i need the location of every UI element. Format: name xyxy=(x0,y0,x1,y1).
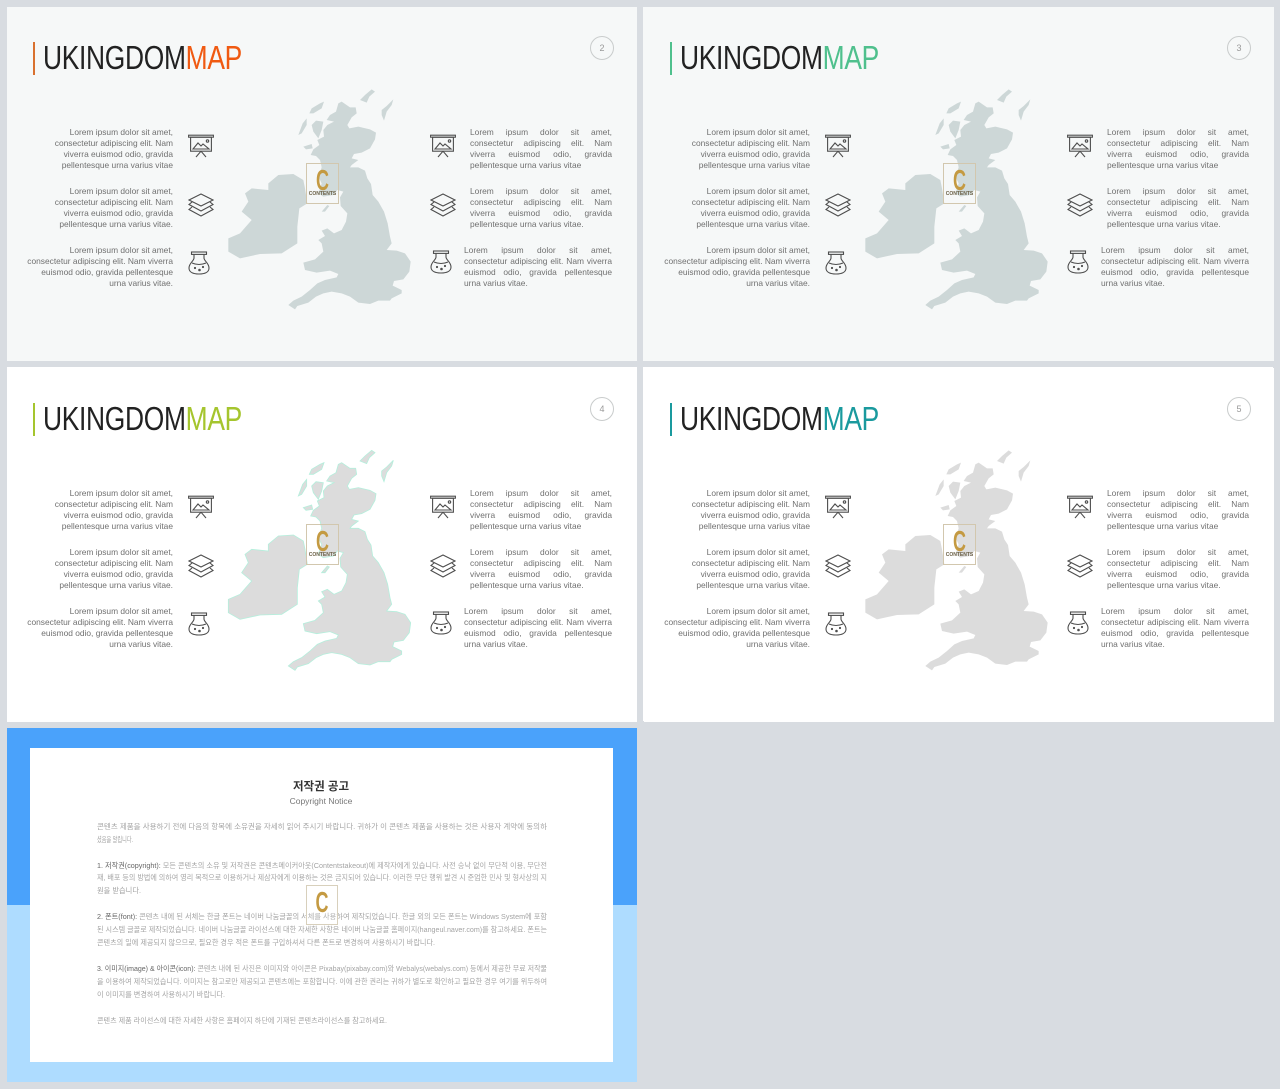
left text 1: consectetur adipiscing elit. Nam xyxy=(692,138,810,148)
left text 2: Lorem ipsum dolor sit amet, xyxy=(707,186,810,196)
icon: flask right xyxy=(1068,250,1088,274)
right text 2: pellentesque urna varius vitae. xyxy=(470,219,584,229)
right text 3: consectetur adipiscing elit. Nam viverra xyxy=(1101,256,1249,266)
left text 2: viverra euismod odio, gravida xyxy=(64,208,173,218)
right text 3 xyxy=(1101,245,1250,288)
right text 2: consectetur adipiscing elit. Nam xyxy=(470,197,612,207)
left text 3: urna varius vitae. xyxy=(109,278,173,288)
left text 2 xyxy=(644,547,810,591)
left text 1: viverra euismod odio, gravida xyxy=(64,149,173,159)
left text 1: viverra euismod odio, gravida xyxy=(64,510,173,520)
right text 2: Lorem ipsum dolor sit amet, xyxy=(1107,186,1249,196)
notice body text: 을 이용하여 제작되었습니다. 이미지는 참고로만 제공되고 콘텐츠에는 포함합니다. 이에 관한 권리는 귀하가 별도로 확인하고 필요한 경우 여기를 위두하여 xyxy=(97,976,547,986)
left text 2: pellentesque urna varius vitae. xyxy=(59,580,173,590)
right text 3: consectetur adipiscing elit. Nam viverra xyxy=(464,256,612,266)
left text 3 xyxy=(664,245,810,288)
two-tone blue background xyxy=(7,728,637,1082)
left text 1: pellentesque urna varius vitae xyxy=(62,521,173,531)
left text 1: viverra euismod odio, gravida xyxy=(701,149,810,159)
right text 1 xyxy=(470,488,612,531)
watermark logo: C xyxy=(953,165,966,197)
right text 1: pellentesque urna varius vitae xyxy=(1107,521,1218,531)
right text 2: Lorem ipsum dolor sit amet, xyxy=(470,186,612,196)
right text 1: consectetur adipiscing elit. Nam xyxy=(470,138,612,148)
icon: presentation board xyxy=(188,496,214,518)
right text 2 xyxy=(470,547,612,591)
icon: layers right xyxy=(430,193,456,217)
right text 2: viverra euismod odio, gravida xyxy=(1107,569,1249,579)
icon: layers right xyxy=(1067,193,1093,217)
watermark logo xyxy=(306,163,339,204)
left text 2: consectetur adipiscing elit. Nam xyxy=(55,558,173,568)
left text 1: consectetur adipiscing elit. Nam xyxy=(692,499,810,509)
icon: layers xyxy=(825,554,851,578)
icon: layers xyxy=(825,193,851,217)
left text 1 xyxy=(55,488,174,531)
notice body text: 원을 받습니다. xyxy=(97,885,141,895)
left text 2: viverra euismod odio, gravida xyxy=(64,569,173,579)
heading: UKINGDOMMAP xyxy=(43,39,242,76)
left text 3: urna varius vitae. xyxy=(746,639,810,649)
notice body text: 3. 이미지(image) & 아이콘(icon): 콘텐츠 내에 된 사진은 이미지와 아이콘은 Pixabay(pixabay.com)와 Webalys(webalys.com) 등에서 제공한 무료 저작물 xyxy=(97,963,547,973)
notice body text: 이 이미지를 변경하여 사용하시기 바랍니다. xyxy=(97,989,225,999)
map of UK and Ireland xyxy=(228,90,411,310)
right text 1: Lorem ipsum dolor sit amet, xyxy=(1107,488,1249,498)
right text 2: consectetur adipiscing elit. Nam xyxy=(1107,197,1249,207)
right text 1: pellentesque urna varius vitae xyxy=(470,521,581,531)
notice body text: 콘텐츠 제품을 사용하기 전에 다음의 항목에 소유권을 자세히 읽어 주시기 바랍니다. 귀하가 이 콘텐츠 제품을 사용하는 것은 사용자 계약에 동의하 xyxy=(97,821,547,831)
watermark logo: C xyxy=(316,887,328,919)
icon: flask right xyxy=(430,611,452,634)
left text 3: euismod odio, gravida pellentesque xyxy=(678,267,810,277)
notice heading: 저작권 공고 xyxy=(293,779,349,793)
heading: UKINGDOMMAP xyxy=(680,39,879,76)
right text 1 xyxy=(1107,488,1249,532)
right text 2 xyxy=(470,186,612,229)
icon: presentation board right xyxy=(1067,134,1093,158)
right text 3: euismod odio, gravida pellentesque xyxy=(1101,628,1249,638)
icon: presentation board right xyxy=(430,496,456,518)
icon: presentation board xyxy=(825,134,851,158)
icon: layers right xyxy=(1067,554,1093,578)
icon: presentation board xyxy=(188,134,214,158)
title accent bar xyxy=(33,403,35,436)
watermark logo xyxy=(306,886,338,924)
left text 3: euismod odio, gravida pellentesque xyxy=(41,628,173,638)
icon: layers xyxy=(188,554,214,578)
heading: UKINGDOMMAP xyxy=(680,400,879,437)
watermark logo xyxy=(943,524,976,565)
notice body text: 콘텐츠 제품 라이선스에 대한 자세한 사항은 홈페이지 하단에 기재된 콘텐츠라이선스를 참고하세요. xyxy=(97,1015,387,1025)
panel: slide 2 orange xyxy=(7,7,637,361)
left text 3: Lorem ipsum dolor sit amet, xyxy=(707,245,810,255)
right text 3 xyxy=(464,606,612,650)
right text 3: consectetur adipiscing elit. Nam viverra xyxy=(464,617,612,627)
right text 2: viverra euismod odio, gravida xyxy=(470,569,612,579)
page number: 5 xyxy=(1236,404,1242,414)
right text 2: consectetur adipiscing elit. Nam xyxy=(470,558,612,568)
right text 1: pellentesque urna varius vitae xyxy=(1107,160,1218,170)
icon: flask xyxy=(826,251,846,274)
map of UK and Ireland xyxy=(847,441,1057,676)
icon: layers xyxy=(188,193,214,217)
right text 3: euismod odio, gravida pellentesque xyxy=(464,267,612,277)
left text 1: Lorem ipsum dolor sit amet, xyxy=(707,127,810,137)
page number xyxy=(590,397,614,421)
left text 2 xyxy=(55,547,174,590)
watermark logo xyxy=(306,524,339,565)
watermark logo xyxy=(943,163,976,204)
right text 2: pellentesque urna varius vitae. xyxy=(470,580,584,590)
left text 3: urna varius vitae. xyxy=(109,639,173,649)
right text 1: viverra euismod odio, gravida xyxy=(1107,149,1249,159)
watermark logo: C xyxy=(316,526,329,558)
notice body text: 재, 배포 등의 방법에 의하여 영리 목적으로 이용하거나 제삼자에게 이용하는 것은 금지되어 있습니다. 이러한 무단 행위 발견 시 준엄한 민사 및 형사상의 지 xyxy=(97,872,547,882)
panel: slide 4 lime xyxy=(7,368,637,722)
left text 1: pellentesque urna varius vitae xyxy=(62,160,173,170)
left text 2: consectetur adipiscing elit. Nam xyxy=(692,197,810,207)
notice subheading: Copyright Notice xyxy=(290,796,353,806)
page number: 4 xyxy=(599,404,604,414)
map of UK and Ireland xyxy=(865,90,1048,310)
left text 2: consectetur adipiscing elit. Nam xyxy=(692,558,810,568)
left text 3 xyxy=(27,606,174,649)
left text 3 xyxy=(27,245,174,288)
icon: layers right xyxy=(430,554,456,578)
notice body text xyxy=(97,821,547,1025)
right text 1 xyxy=(470,127,612,170)
left text 1: Lorem ipsum dolor sit amet, xyxy=(70,127,173,137)
left text 3: Lorem ipsum dolor sit amet, xyxy=(707,606,810,616)
right text 3: Lorem ipsum dolor sit amet, xyxy=(1101,606,1249,616)
left text 3 xyxy=(644,606,810,650)
right text 2 xyxy=(1107,186,1250,229)
title accent bar xyxy=(670,403,672,436)
right text 2: viverra euismod odio, gravida xyxy=(1107,208,1249,218)
right text 1: Lorem ipsum dolor sit amet, xyxy=(1107,127,1249,137)
right text 3 xyxy=(1101,606,1249,650)
icon: presentation board right xyxy=(430,134,456,158)
title accent bar xyxy=(33,42,35,75)
watermark logo: CONTENTS xyxy=(309,191,336,197)
right text 1: consectetur adipiscing elit. Nam xyxy=(470,499,612,509)
right text 3: euismod odio, gravida pellentesque xyxy=(464,628,612,638)
heading: UKINGDOMMAP xyxy=(43,400,242,437)
left text 3: consectetur adipiscing elit. Nam viverra xyxy=(27,256,173,266)
right text 1: Lorem ipsum dolor sit amet, xyxy=(470,127,612,137)
left text 1: pellentesque urna varius vitae xyxy=(699,160,810,170)
icon: flask xyxy=(188,251,210,274)
page number xyxy=(1227,397,1251,421)
panel: slide 3 green xyxy=(644,7,1274,361)
icon: flask xyxy=(188,612,210,636)
left text 1 xyxy=(692,127,810,170)
page number: 3 xyxy=(1236,43,1242,53)
icon: flask right xyxy=(430,250,452,274)
notice body text: 셨음을 알립니다. xyxy=(97,834,133,844)
watermark logo: CONTENTS xyxy=(309,552,336,558)
page number xyxy=(590,36,614,60)
left text 1: Lorem ipsum dolor sit amet, xyxy=(707,488,810,498)
right text 1: viverra euismod odio, gravida xyxy=(470,510,612,520)
left text 1: Lorem ipsum dolor sit amet, xyxy=(70,488,173,498)
left text 2: Lorem ipsum dolor sit amet, xyxy=(70,547,173,557)
icon: presentation board xyxy=(825,495,851,519)
right text 3: urna varius vitae. xyxy=(464,278,528,288)
left text 2: viverra euismod odio, gravida xyxy=(701,569,810,579)
right text 2: viverra euismod odio, gravida xyxy=(470,208,612,218)
left text 3: urna varius vitae. xyxy=(746,278,810,288)
right text 3: euismod odio, gravida pellentesque xyxy=(1101,267,1249,277)
notice body text: 1. 저작권(copyright): 모든 콘텐츠의 소유 및 저작권은 콘텐츠메이커아웃(Contentstakeout)에 제작자에게 있습니다. 사전 승낙 없이 무단적 이용, 무단전 xyxy=(97,860,547,870)
right text 2: pellentesque urna varius vitae. xyxy=(1107,580,1221,590)
right text 3: urna varius vitae. xyxy=(1101,639,1165,649)
icon: flask xyxy=(825,612,851,636)
icon: presentation board right xyxy=(1067,495,1093,519)
right text 3: urna varius vitae. xyxy=(1101,278,1165,288)
right text 1 xyxy=(1107,127,1250,170)
left text 3: consectetur adipiscing elit. Nam viverra xyxy=(664,617,810,627)
right text 1: pellentesque urna varius vitae xyxy=(470,160,581,170)
left text 1: viverra euismod odio, gravida xyxy=(701,510,810,520)
left text 2: viverra euismod odio, gravida xyxy=(701,208,810,218)
right text 3: Lorem ipsum dolor sit amet, xyxy=(464,606,612,616)
page number: 2 xyxy=(599,43,604,53)
left text 1: consectetur adipiscing elit. Nam xyxy=(55,138,173,148)
right text 1: consectetur adipiscing elit. Nam xyxy=(1107,138,1249,148)
watermark logo: CONTENTS xyxy=(946,552,973,558)
panel: slide 5 teal xyxy=(644,368,1274,722)
left text 3: euismod odio, gravida pellentesque xyxy=(678,628,810,638)
left text 2: pellentesque urna varius vitae. xyxy=(696,580,810,590)
left text 2: Lorem ipsum dolor sit amet, xyxy=(70,186,173,196)
left text 1: consectetur adipiscing elit. Nam xyxy=(55,499,173,509)
left text 3: consectetur adipiscing elit. Nam viverra xyxy=(664,256,810,266)
left text 3: Lorem ipsum dolor sit amet, xyxy=(70,606,173,616)
right text 1: consectetur adipiscing elit. Nam xyxy=(1107,499,1249,509)
right text 1: viverra euismod odio, gravida xyxy=(1107,510,1249,520)
right text 1: viverra euismod odio, gravida xyxy=(470,149,612,159)
notice body text: 콘텐츠의 일에 제공되지 않으므로, 필요한 경우 적은 폰트를 구입하셔서 다른 폰트로 변경하여 사용하시기 바랍니다. xyxy=(97,937,435,947)
notice body text: 2. 폰트(font): 콘텐츠 내에 된 서체는 한글 폰트는 네이버 나눔글꼴의 서체를 사용하여 제작되었습니다. 한글 외의 모든 폰트는 Windows System에 포함 xyxy=(97,911,547,921)
page number xyxy=(1227,36,1251,60)
left text 3: consectetur adipiscing elit. Nam viverra xyxy=(27,617,173,627)
watermark logo: C xyxy=(953,526,966,558)
left text 2: pellentesque urna varius vitae. xyxy=(59,219,173,229)
left text 1 xyxy=(644,488,810,532)
right text 3: Lorem ipsum dolor sit amet, xyxy=(1101,245,1249,255)
right text 1: Lorem ipsum dolor sit amet, xyxy=(470,488,612,498)
title accent bar xyxy=(670,42,672,75)
right text 2 xyxy=(1107,547,1249,591)
left text 2 xyxy=(692,186,810,229)
left text 3: euismod odio, gravida pellentesque xyxy=(41,267,173,277)
icon: flask right xyxy=(1067,611,1093,635)
right text 3 xyxy=(464,245,612,288)
left text 2: consectetur adipiscing elit. Nam xyxy=(55,197,173,207)
right text 3: Lorem ipsum dolor sit amet, xyxy=(464,245,612,255)
left text 1 xyxy=(55,127,174,170)
right text 3: urna varius vitae. xyxy=(464,639,528,649)
left text 1: pellentesque urna varius vitae xyxy=(699,521,810,531)
watermark logo: CONTENTS xyxy=(946,191,973,197)
right text 2: consectetur adipiscing elit. Nam xyxy=(1107,558,1249,568)
left text 2 xyxy=(55,186,174,229)
map of UK and Ireland with mint outline xyxy=(228,450,411,671)
white notice card xyxy=(30,748,613,1062)
watermark logo: C xyxy=(316,165,329,197)
left text 3: Lorem ipsum dolor sit amet, xyxy=(70,245,173,255)
notice body text: 된 시스템 글꼴로 제작되었습니다. 네이버 나눔글꼴 라이선스에 대한 자세한 사항은 네이버 나눔글꼴 홈페이지(hangeul.naver.com)를 참고하세요. 폰트는 xyxy=(97,924,547,934)
right text 2: Lorem ipsum dolor sit amet, xyxy=(1107,547,1249,557)
right text 3: consectetur adipiscing elit. Nam viverra xyxy=(1101,617,1249,627)
right text 2: pellentesque urna varius vitae. xyxy=(1107,219,1221,229)
right text 2: Lorem ipsum dolor sit amet, xyxy=(470,547,612,557)
left text 2: pellentesque urna varius vitae. xyxy=(696,219,810,229)
left text 2: Lorem ipsum dolor sit amet, xyxy=(707,547,810,557)
